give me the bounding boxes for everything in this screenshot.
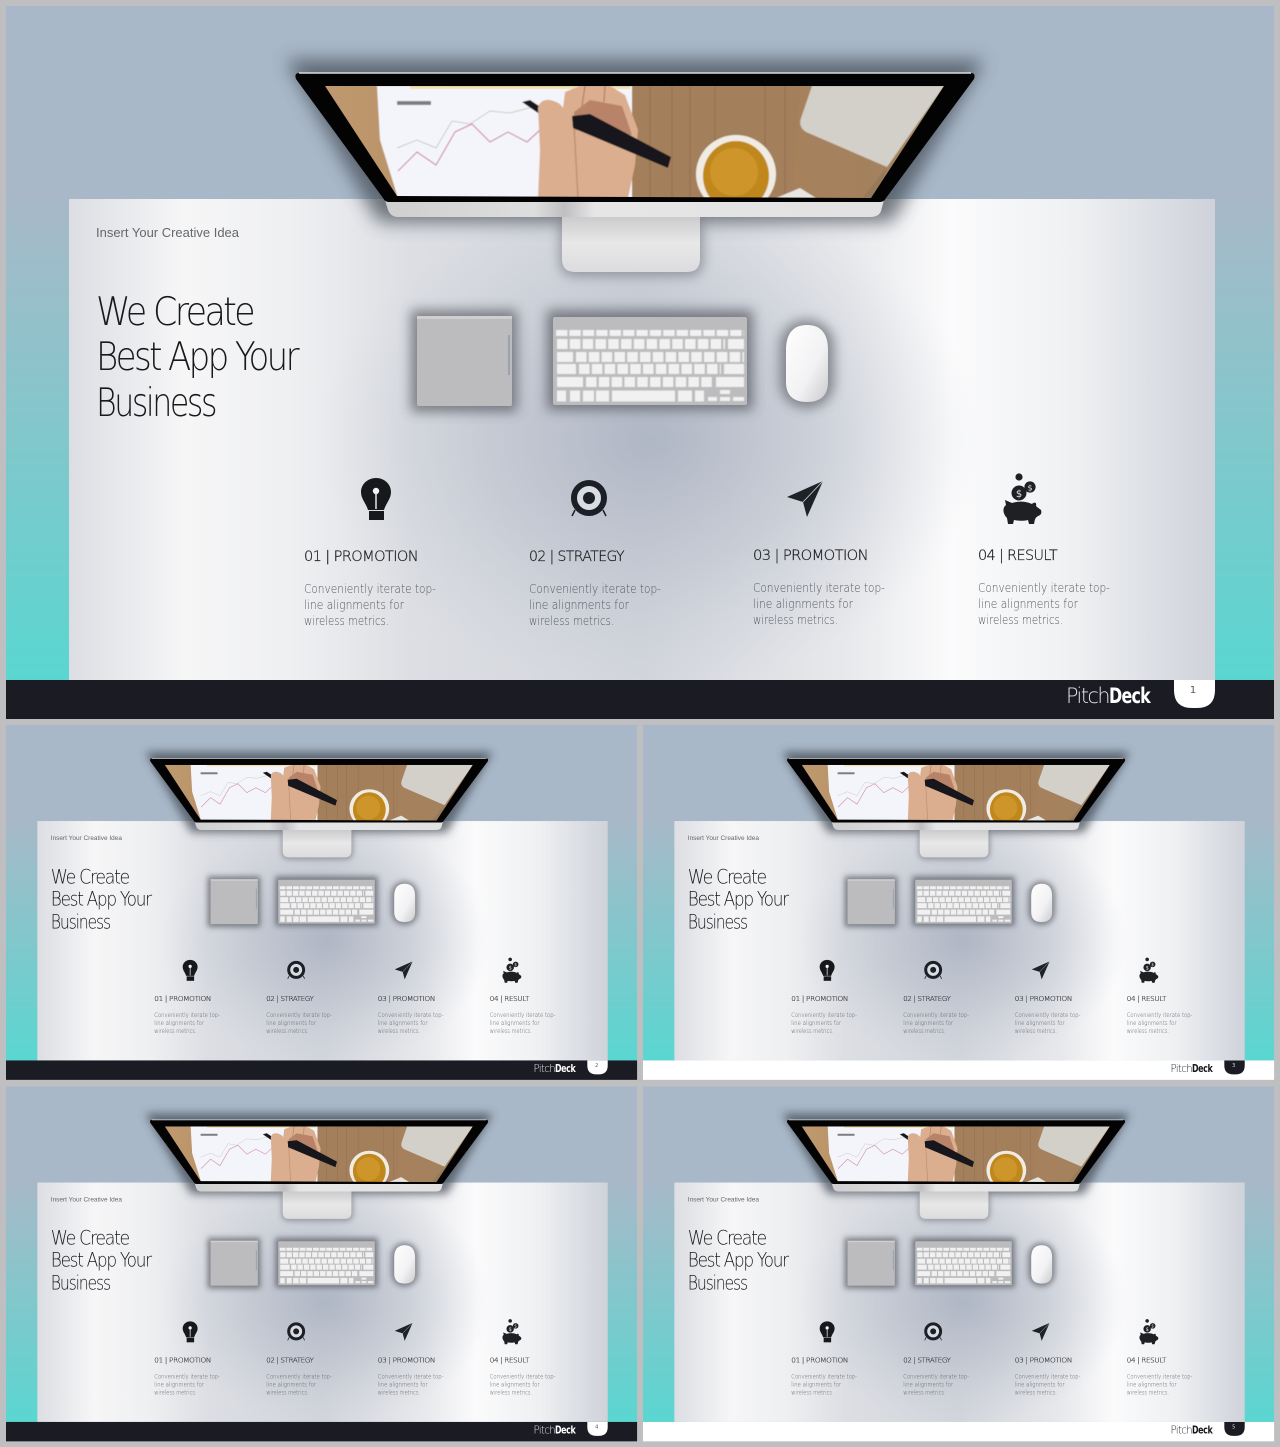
column 2: strategy: 02 | STRATEGY [266, 1357, 315, 1365]
icon: piggy bank: $ [1146, 965, 1149, 971]
column 4: result: wireless metrics. [1127, 1028, 1169, 1035]
slide 3 [643, 725, 1274, 1080]
icon: target [925, 1324, 942, 1340]
page tab [587, 1060, 608, 1074]
column 2: strategy [529, 483, 661, 628]
title: Best App Your [51, 888, 152, 911]
page tab [1174, 680, 1215, 708]
column 1: promotion: 01 | PROMOTION [791, 1357, 848, 1365]
icon: piggy bank: $ [1151, 1324, 1154, 1329]
icon: target [288, 962, 305, 979]
icon: piggy bank: $ [514, 1324, 517, 1329]
column 1: promotion: 01 | PROMOTION [304, 549, 418, 565]
footer bar [6, 1060, 637, 1080]
column 2: strategy: 02 | STRATEGY [529, 549, 625, 565]
white content panel [37, 1183, 608, 1422]
column 3: promotion: wireless metrics. [1015, 1028, 1057, 1035]
tagline: Insert Your Creative Idea [51, 835, 122, 842]
column 1: promotion: Conveniently iterate top- [154, 1374, 220, 1381]
column 1: promotion [154, 960, 220, 1035]
column 3: promotion: Conveniently iterate top- [378, 1012, 443, 1019]
icon: desktop monitor with photo [782, 752, 1130, 859]
column 4: result: line alignments for [1127, 1020, 1177, 1027]
column 4: result: line alignments for [1127, 1382, 1177, 1389]
icon: paper plane [395, 961, 413, 979]
column 1: promotion [791, 960, 857, 1035]
icon: desktop monitor with photo [782, 1113, 1130, 1221]
column 2: strategy: Conveniently iterate top- [903, 1374, 969, 1381]
icon: target [925, 962, 942, 979]
column 2: strategy: wireless metrics. [529, 614, 614, 628]
column 4: result: Conveniently iterate top- [1127, 1374, 1192, 1381]
title [51, 865, 152, 934]
icon: piggy bank: $ [1146, 1327, 1149, 1333]
title: We Create [51, 1226, 129, 1249]
icon: piggy bank [1139, 958, 1158, 983]
slide 4 [6, 1086, 637, 1441]
column 2: strategy [266, 1324, 332, 1397]
column 4: result: Conveniently iterate top- [978, 581, 1110, 595]
slide background gradient [643, 725, 1274, 1060]
tagline: Insert Your Creative Idea [96, 225, 240, 240]
column 3: promotion [378, 1323, 443, 1397]
column 4: result: line alignments for [490, 1020, 540, 1027]
column 2: strategy: 02 | STRATEGY [266, 995, 315, 1003]
white content panel [69, 199, 1215, 680]
tagline: Insert Your Creative Idea [688, 1196, 759, 1203]
column 1: promotion: line alignments for [304, 598, 404, 612]
column 2: strategy: Conveniently iterate top- [903, 1012, 969, 1019]
logo: Pitch [534, 1424, 555, 1436]
icon: keyboard [912, 876, 1015, 926]
column 4: result [490, 958, 555, 1035]
icon: keyboard [275, 1238, 378, 1288]
title: Business [688, 911, 747, 934]
footer bar [643, 1422, 1274, 1441]
column 4: result: Conveniently iterate top- [1127, 1012, 1192, 1019]
logo [534, 1424, 577, 1436]
logo [1066, 684, 1152, 708]
column 2: strategy: Conveniently iterate top- [266, 1374, 332, 1381]
title [688, 1226, 789, 1295]
column 4: result: 04 | RESULT [1127, 1357, 1167, 1365]
column 1: promotion: 01 | PROMOTION [791, 995, 848, 1003]
logo [1171, 1424, 1214, 1436]
page number: 3 [1232, 1063, 1235, 1069]
title: Best App Your [688, 888, 789, 911]
column 2: strategy [903, 1324, 969, 1397]
icon: mouse [391, 881, 418, 925]
column 3: promotion: wireless metrics. [378, 1028, 420, 1035]
icon: piggy bank: $ [509, 965, 512, 971]
white content panel [37, 821, 608, 1060]
column 4: result [1127, 1319, 1192, 1397]
footer bar [643, 1060, 1274, 1080]
title: Best App Your [96, 335, 300, 380]
column 1: promotion: wireless metrics. [791, 1390, 834, 1397]
icon: light bulb [820, 1321, 835, 1342]
icon: desktop monitor with photo [286, 60, 984, 276]
title: We Create [688, 865, 766, 888]
column 4: result: 04 | RESULT [1127, 995, 1167, 1003]
icon: piggy bank [1139, 1319, 1158, 1344]
page number: 5 [1232, 1424, 1235, 1430]
column 2: strategy: wireless metrics. [903, 1028, 946, 1035]
column 3: promotion: line alignments for [1015, 1382, 1065, 1389]
column 4: result: line alignments for [978, 597, 1078, 611]
column 2: strategy: line alignments for [903, 1382, 954, 1389]
slide background gradient [6, 1086, 637, 1422]
column 4: result: wireless metrics. [978, 613, 1063, 627]
footer bar [6, 680, 1274, 719]
icon: mouse [780, 320, 834, 408]
icon: piggy bank: $ [509, 1327, 512, 1333]
page number: 1 [1190, 685, 1196, 696]
column 2: strategy: line alignments for [903, 1020, 954, 1027]
page number: 4 [595, 1424, 598, 1430]
page number: 2 [595, 1063, 598, 1069]
logo: Pitch [1171, 1063, 1192, 1075]
column 3: promotion: wireless metrics. [753, 613, 838, 627]
title: Best App Your [688, 1249, 789, 1272]
icon: paper plane [787, 481, 823, 517]
icon: mouse [391, 1243, 418, 1287]
column 3: promotion: 03 | PROMOTION [1015, 1357, 1072, 1365]
column 2: strategy: 02 | STRATEGY [903, 1357, 952, 1365]
column 1: promotion: Conveniently iterate top- [791, 1374, 857, 1381]
column 2: strategy [903, 962, 969, 1035]
icon: desktop monitor with photo [145, 1113, 493, 1221]
white content panel [674, 821, 1245, 1060]
column 3: promotion: line alignments for [378, 1382, 428, 1389]
slide 5 [643, 1086, 1274, 1441]
icon: trackpad [845, 1238, 897, 1289]
column 1: promotion [154, 1321, 220, 1397]
logo [534, 1063, 577, 1075]
column 4: result: wireless metrics. [490, 1028, 532, 1035]
column 1: promotion: Conveniently iterate top- [791, 1012, 857, 1019]
icon: piggy bank: $ [514, 962, 517, 967]
column 2: strategy: line alignments for [266, 1020, 317, 1027]
icon: trackpad [208, 1238, 260, 1289]
slide 2 [6, 725, 637, 1080]
column 3: promotion [378, 961, 443, 1035]
logo: Pitch [534, 1063, 555, 1075]
column 1: promotion: line alignments for [791, 1382, 842, 1389]
column 1: promotion: 01 | PROMOTION [154, 995, 211, 1003]
title: We Create [51, 865, 129, 888]
icon: light bulb [183, 960, 198, 981]
icon: trackpad [411, 310, 517, 412]
icon: paper plane [1032, 961, 1050, 979]
column 1: promotion: line alignments for [791, 1020, 842, 1027]
icon: light bulb [361, 478, 391, 520]
page tab [1224, 1422, 1245, 1436]
title: Best App Your [51, 1249, 152, 1272]
column 4: result: line alignments for [490, 1382, 540, 1389]
title [51, 1226, 152, 1295]
icon: piggy bank: $ [1027, 484, 1033, 492]
column 3: promotion: 03 | PROMOTION [1015, 995, 1072, 1003]
column 4: result: 04 | RESULT [978, 548, 1058, 564]
column 2: strategy: line alignments for [266, 1382, 317, 1389]
column 3: promotion: wireless metrics. [1015, 1390, 1057, 1397]
column 3: promotion [1015, 1323, 1080, 1397]
column 1: promotion: wireless metrics. [791, 1028, 834, 1035]
icon: piggy bank: $ [1016, 489, 1022, 500]
icon: piggy bank: $ [1151, 962, 1154, 967]
column 3: promotion: 03 | PROMOTION [753, 548, 868, 564]
logo: Pitch [1066, 684, 1109, 708]
icon: target [572, 483, 606, 516]
column 2: strategy: wireless metrics. [266, 1390, 309, 1397]
column 4: result [1127, 958, 1192, 1035]
column 4: result: 04 | RESULT [490, 995, 530, 1003]
column 1: promotion: line alignments for [154, 1382, 205, 1389]
icon: mouse [1028, 881, 1055, 925]
column 3: promotion: Conveniently iterate top- [753, 581, 885, 595]
column 3: promotion: line alignments for [753, 597, 853, 611]
title: Business [51, 1272, 110, 1295]
column 3: promotion: wireless metrics. [378, 1390, 420, 1397]
icon: desktop monitor with photo [145, 752, 493, 859]
icon: keyboard [547, 310, 753, 410]
page tab [1224, 1060, 1245, 1074]
column 4: result [490, 1319, 555, 1397]
tagline: Insert Your Creative Idea [51, 1196, 122, 1203]
column 2: strategy: Conveniently iterate top- [529, 582, 661, 596]
column 4: result: Conveniently iterate top- [490, 1374, 555, 1381]
logo: Deck [1109, 684, 1152, 708]
logo: Deck [555, 1424, 577, 1436]
column 3: promotion: Conveniently iterate top- [1015, 1012, 1080, 1019]
column 3: promotion [1015, 961, 1080, 1035]
slide background gradient [643, 1086, 1274, 1422]
column 3: promotion [753, 481, 885, 627]
title: We Create [688, 1226, 766, 1249]
column 1: promotion: Conveniently iterate top- [304, 582, 436, 596]
icon: light bulb [820, 960, 835, 981]
title: Business [51, 911, 110, 934]
title: Business [96, 381, 216, 426]
page tab [587, 1422, 608, 1436]
icon: trackpad [208, 876, 260, 927]
column 4: result: Conveniently iterate top- [490, 1012, 555, 1019]
column 3: promotion: 03 | PROMOTION [378, 995, 435, 1003]
column 4: result: wireless metrics. [1127, 1390, 1169, 1397]
icon: piggy bank [502, 958, 521, 983]
icon: light bulb [183, 1321, 198, 1342]
icon: keyboard [912, 1238, 1015, 1288]
footer bar [6, 1422, 637, 1441]
icon: trackpad [845, 876, 897, 927]
title [96, 290, 300, 426]
logo [1171, 1063, 1214, 1075]
column 2: strategy: line alignments for [529, 598, 629, 612]
column 3: promotion: 03 | PROMOTION [378, 1357, 435, 1365]
column 3: promotion: Conveniently iterate top- [1015, 1374, 1080, 1381]
icon: target [288, 1324, 305, 1340]
column 1: promotion [791, 1321, 857, 1397]
logo: Deck [555, 1063, 577, 1075]
title [688, 865, 789, 934]
column 4: result: 04 | RESULT [490, 1357, 530, 1365]
logo: Deck [1192, 1063, 1214, 1075]
icon: mouse [1028, 1243, 1055, 1287]
icon: piggy bank [1003, 473, 1041, 524]
column 3: promotion: line alignments for [378, 1020, 428, 1027]
logo: Pitch [1171, 1424, 1192, 1436]
icon: keyboard [275, 876, 378, 926]
icon: piggy bank [502, 1319, 521, 1344]
column 2: strategy [266, 962, 332, 1035]
tagline: Insert Your Creative Idea [688, 835, 759, 842]
slide 1 (large) [6, 6, 1274, 719]
title: Business [688, 1272, 747, 1295]
column 1: promotion [304, 478, 436, 628]
column 2: strategy: wireless metrics. [903, 1390, 946, 1397]
column 2: strategy: Conveniently iterate top- [266, 1012, 332, 1019]
column 2: strategy: 02 | STRATEGY [903, 995, 952, 1003]
column 4: result [978, 473, 1110, 627]
slide background gradient [6, 6, 1274, 680]
column 1: promotion: wireless metrics. [304, 614, 389, 628]
icon: paper plane [395, 1323, 413, 1341]
title: We Create [96, 290, 254, 335]
column 1: promotion: Conveniently iterate top- [154, 1012, 220, 1019]
column 1: promotion: wireless metrics. [154, 1390, 197, 1397]
column 1: promotion: line alignments for [154, 1020, 205, 1027]
column 2: strategy: wireless metrics. [266, 1028, 309, 1035]
slide background gradient [6, 725, 637, 1060]
column 4: result: wireless metrics. [490, 1390, 532, 1397]
white content panel [674, 1183, 1245, 1422]
column 1: promotion: wireless metrics. [154, 1028, 197, 1035]
column 1: promotion: 01 | PROMOTION [154, 1357, 211, 1365]
icon: paper plane [1032, 1323, 1050, 1341]
column 3: promotion: line alignments for [1015, 1020, 1065, 1027]
column 3: promotion: Conveniently iterate top- [378, 1374, 443, 1381]
logo: Deck [1192, 1424, 1214, 1436]
